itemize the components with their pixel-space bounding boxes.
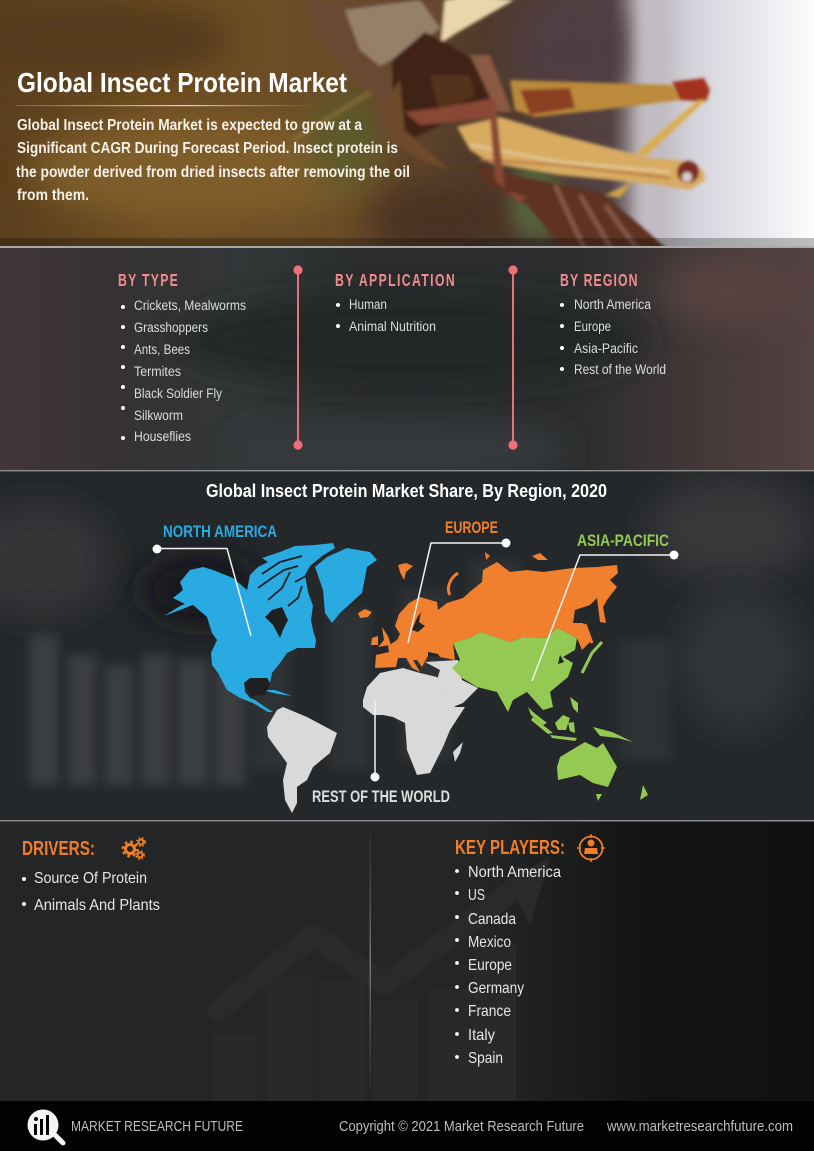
callout: asia-pacific: ASIA-PACIFIC [577,531,669,550]
map region: asia-pacific [452,628,648,801]
segment column: by region: Rest of the World [574,362,666,377]
map region: north america [164,543,377,712]
gaps: hudson bay and arctic channels [244,556,306,696]
segment column: by type: Termites [134,364,181,379]
segment column: by application: Animal Nutrition [349,319,436,334]
column: drivers: Source Of Protein [34,870,147,887]
panel: segmentation [0,248,814,480]
text: brand name: MARKET RESEARCH FUTURE [71,1118,243,1135]
map region: europe and russia [358,552,618,672]
column: key players: Canada [468,911,516,928]
segment column: by type: Crickets, Mealworms [134,298,246,313]
segment column: by region: Asia-Pacific [574,341,638,356]
text block: intro paragraph: the powder derived from dried insects after removing the oil [16,164,410,181]
column: key players: France [468,1003,511,1020]
segment column: by region: North America [574,297,651,312]
icon: grasshopper [293,0,710,250]
text block: intro paragraph: Global Insect Protein Market is expected to grow at a [17,117,362,134]
column: key players: KEY PLAYERS: [455,837,565,859]
segment column: by type: Houseflies [134,429,191,444]
callout: asia-pacific [532,531,678,681]
panel: drivers and key players [0,822,605,1101]
segment column: by type: BY TYPE [118,271,178,291]
panel: hero header [0,0,814,260]
segment column: by type [118,271,246,444]
heading: map title: Global Insect Protein Market Share, By Region, 2020 [206,481,607,501]
column: key players: US [468,887,485,904]
icon: people in target [577,834,605,862]
divider: pink line one [293,265,303,450]
segment column: by region [560,271,666,377]
text block: intro paragraph: from them. [17,187,89,204]
segment column: by application: BY APPLICATION [335,271,455,291]
world map [164,543,648,813]
column: drivers [22,838,160,914]
column: drivers: Animals And Plants [34,897,160,914]
column: key players: Mexico [468,934,511,951]
segment column: by region: BY REGION [560,271,638,291]
column: key players [455,834,605,1067]
icon: gears [123,838,145,859]
segment column: by application [335,271,455,334]
column: drivers: DRIVERS: [22,838,95,860]
callout: rest of the world: REST OF THE WORLD [312,787,450,806]
column: key players: Italy [468,1027,495,1044]
panel: regional map [0,472,814,822]
map region: south america [267,707,337,813]
segment column: by type: Silkworm [134,408,183,423]
segment column: by type: Ants, Bees [134,342,190,357]
callout: europe: EUROPE [445,518,498,537]
map region: africa and middle east [363,660,478,775]
column: key players: Germany [468,980,524,997]
text: copyright: Copyright © 2021 Market Research Future [339,1118,584,1135]
segment column: by type: Black Soldier Fly [134,386,222,401]
icon: logo [28,1110,63,1143]
text block: intro paragraph [16,117,410,204]
text: website: www.marketresearchfuture.com [606,1118,793,1135]
callout: europe [408,518,510,643]
column: key players: North America [468,864,561,881]
callout: rest of the world [312,701,450,806]
footer [0,1101,814,1151]
heading: main title: Global Insect Protein Market [17,67,347,98]
text block: intro paragraph: Significant CAGR During Forecast Period. Insect protein is [17,140,398,157]
callout: north america [152,522,277,636]
segment column: by region: Europe [574,319,611,334]
divider: pink line two [508,265,518,450]
callout: north america: NORTH AMERICA [163,522,277,541]
segment column: by type: Grasshoppers [134,320,208,335]
column: key players: Europe [468,957,512,974]
column: key players: Spain [468,1050,503,1067]
segment column: by application: Human [349,297,387,312]
